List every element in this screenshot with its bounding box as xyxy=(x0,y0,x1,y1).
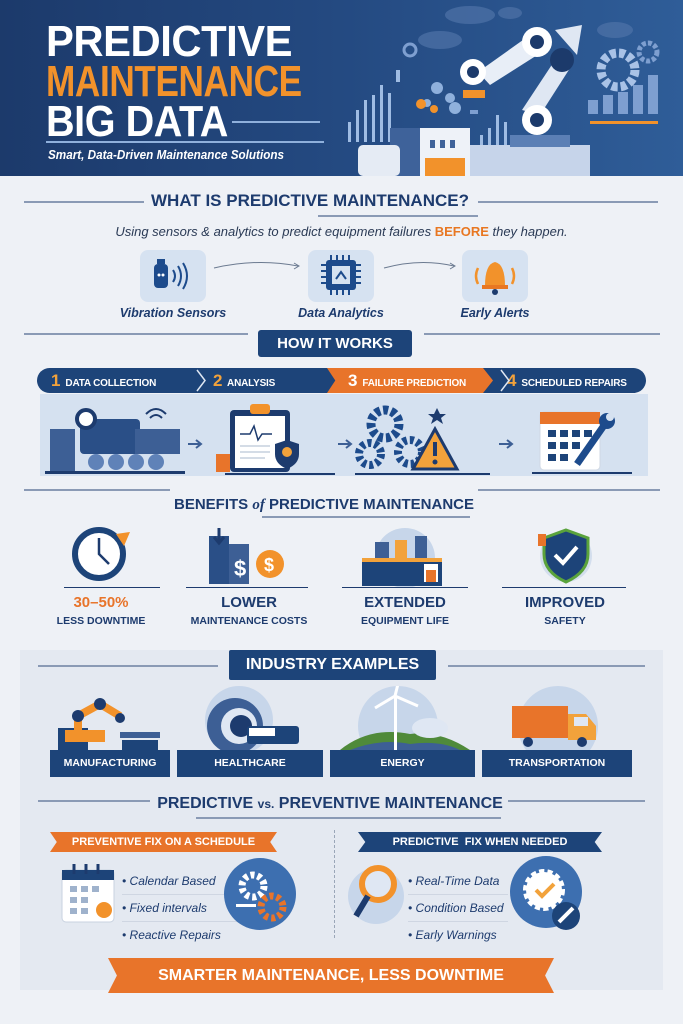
heading: WHAT IS PREDICTIVE MAINTENANCE? xyxy=(151,191,469,210)
icon: data analytics xyxy=(308,250,374,302)
arrow xyxy=(214,262,300,270)
energy xyxy=(330,686,475,777)
benefit 2: $ xyxy=(234,556,246,581)
benefit 2: MAINTENANCE COSTS xyxy=(191,615,307,627)
icon labels: Vibration Sensors xyxy=(120,306,226,320)
text: Data Analytics xyxy=(298,306,384,320)
machine blocks xyxy=(390,128,470,176)
ribbon: preventive xyxy=(50,832,277,852)
list: preventive xyxy=(122,874,237,942)
icon: early alerts xyxy=(462,250,528,302)
heading box xyxy=(229,650,436,680)
benefit 1: LESS DOWNTIME xyxy=(57,615,145,627)
benefit 1: 30–50% xyxy=(73,594,129,611)
illustration: robot and data xyxy=(348,6,660,176)
icon: gears circle xyxy=(224,858,296,930)
benefit 2 xyxy=(186,528,308,627)
title: BIG DATA xyxy=(46,97,228,146)
section: how it works xyxy=(24,330,660,476)
ribbon: predictive xyxy=(358,832,602,852)
heading box: INDUSTRY EXAMPLES xyxy=(246,656,419,673)
bottom banner: SMARTER MAINTENANCE, LESS DOWNTIME xyxy=(158,967,504,984)
list: predictive: • Real-Time Data xyxy=(408,874,499,888)
icon: gear check xyxy=(510,856,582,930)
benefit 4: SAFETY xyxy=(544,615,586,627)
section: what is predictive maintenance xyxy=(24,191,658,239)
heading box xyxy=(258,330,412,357)
manufacturing xyxy=(50,698,170,777)
list: preventive: • Reactive Repairs xyxy=(122,928,221,942)
description: Using sensors & analytics to predict equipment failures BEFORE they happen. xyxy=(115,224,568,239)
ribbon: predictive: PREDICTIVE FIX WHEN NEEDED xyxy=(393,836,567,848)
benefit 4: IMPROVED xyxy=(525,594,605,611)
title: MAINTENANCE xyxy=(46,57,302,106)
title: PREDICTIVE xyxy=(46,17,292,66)
benefit 1 xyxy=(57,527,160,627)
heading: BENEFITS of PREDICTIVE MAINTENANCE xyxy=(174,496,474,513)
ribbon: preventive: PREVENTIVE FIX ON A SCHEDULE xyxy=(72,836,255,848)
step illustrations xyxy=(40,394,648,476)
energy: ENERGY xyxy=(380,757,425,769)
icon: calendar xyxy=(62,864,114,922)
benefit 2: LOWER xyxy=(221,594,277,611)
benefit 3: EQUIPMENT LIFE xyxy=(361,615,449,627)
healthcare xyxy=(177,686,323,777)
icon: vibration sensors xyxy=(140,250,206,302)
heading box: HOW IT WORKS xyxy=(277,335,393,352)
bottom banner xyxy=(108,958,554,993)
section: predictive vs preventive xyxy=(38,795,645,942)
step bar: 4 SCHEDULED REPAIRS xyxy=(507,371,627,390)
step bar xyxy=(37,368,646,393)
benefit 3 xyxy=(342,528,468,627)
heading: PREDICTIVE vs. PREVENTIVE MAINTENANCE xyxy=(157,795,503,812)
list: preventive: • Fixed intervals xyxy=(122,901,207,915)
subtitle: Smart, Data-Driven Maintenance Solutions xyxy=(48,147,284,162)
text: Early Alerts xyxy=(460,306,530,320)
step bar: 3 FAILURE PREDICTION xyxy=(348,371,466,390)
panel: industry + comparison xyxy=(20,650,663,990)
list: predictive: • Early Warnings xyxy=(408,928,497,942)
healthcare: HEALTHCARE xyxy=(214,757,286,769)
robot arm xyxy=(478,35,542,85)
transportation xyxy=(482,686,632,777)
benefit 3: EXTENDED xyxy=(364,594,446,611)
title xyxy=(46,17,302,146)
arrow xyxy=(384,262,456,270)
header banner xyxy=(0,0,683,176)
benefit 4 xyxy=(502,528,626,627)
list: preventive: • Calendar Based xyxy=(122,874,216,888)
section: industry examples xyxy=(38,650,645,777)
icon: magnifier xyxy=(348,865,404,924)
transportation: TRANSPORTATION xyxy=(509,757,605,769)
list: predictive xyxy=(408,874,508,942)
manufacturing: MANUFACTURING xyxy=(64,757,156,769)
benefit 2: $ xyxy=(264,555,274,575)
step bar: 2 ANALYSIS xyxy=(213,371,275,390)
section: benefits xyxy=(24,489,660,627)
step bar: 1 DATA COLLECTION xyxy=(51,371,156,390)
list: predictive: • Condition Based xyxy=(408,901,504,915)
